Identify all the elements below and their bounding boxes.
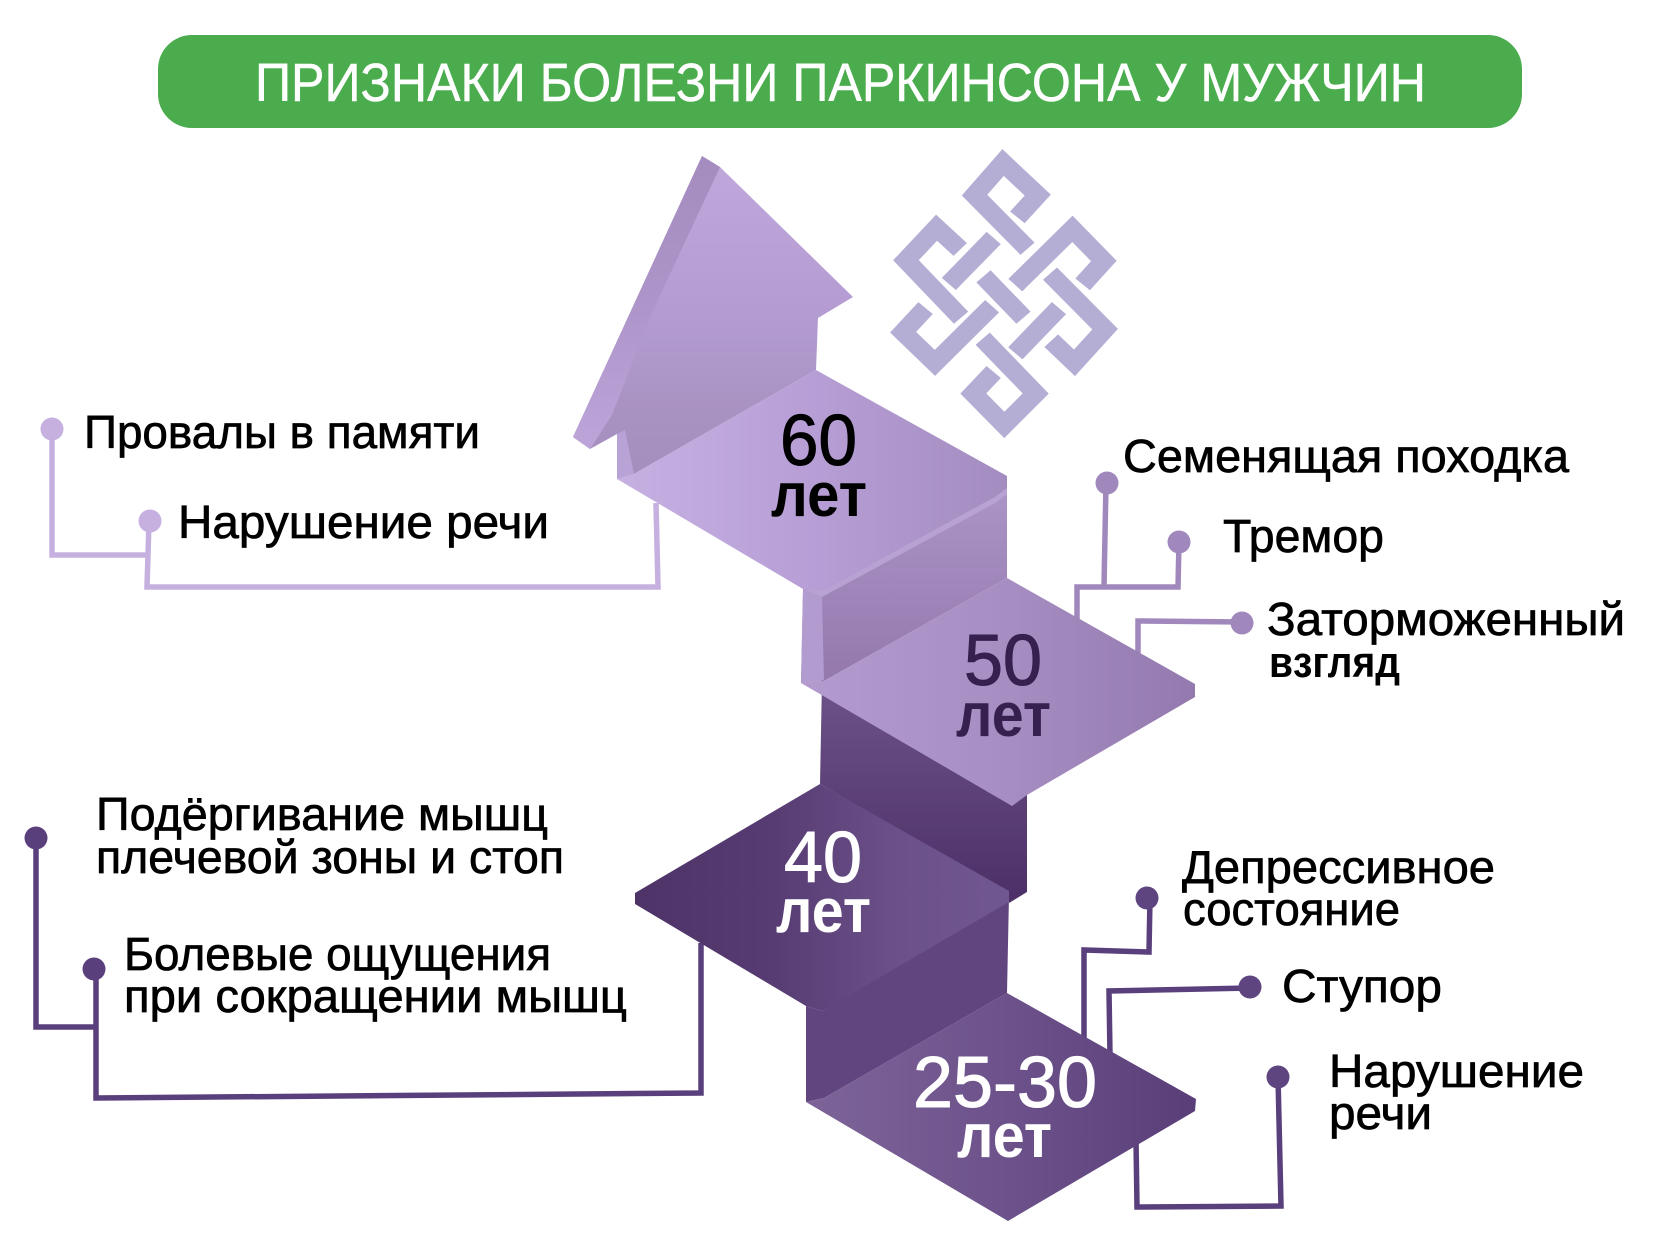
step 50 bbox=[801, 578, 1195, 806]
dot: memory lapses bbox=[40, 418, 64, 440]
label: speech disorder: Нарушение речи bbox=[178, 496, 549, 548]
step 25-30: 25-30 bbox=[913, 1043, 1097, 1123]
label: muscle twitching bbox=[96, 788, 564, 883]
dot: speech disorder bbox=[1266, 1066, 1290, 1088]
title banner bbox=[158, 35, 1522, 128]
step 40: лет bbox=[776, 877, 871, 946]
step 25-30 bbox=[806, 993, 1196, 1221]
dot: tremor bbox=[1168, 530, 1190, 554]
label: muscle twitching: Подёргивание мышц bbox=[96, 788, 548, 840]
label: muscle pain: при сокращении мышц bbox=[124, 970, 627, 1022]
dot: speech disorder bbox=[138, 510, 162, 532]
step 50: 50 bbox=[964, 621, 1042, 701]
dot: depression bbox=[1136, 886, 1158, 910]
label: muscle twitching: плечевой зоны и стоп bbox=[96, 831, 564, 883]
dot: muscle twitching bbox=[24, 826, 48, 850]
label: depression bbox=[1182, 841, 1495, 935]
symptoms at 60 bbox=[40, 406, 549, 548]
label: stupor: Ступор bbox=[1282, 960, 1442, 1012]
symptoms at 50 bbox=[1096, 430, 1625, 687]
label: depression: состояние bbox=[1183, 883, 1400, 935]
riser between 40 and 25-30 bbox=[806, 895, 1009, 1102]
title banner: ПРИЗНАКИ БОЛЕЗНИ ПАРКИНСОНА У МУЖЧИН bbox=[255, 53, 1426, 113]
arrow head bbox=[573, 156, 853, 479]
label: speech disorder bbox=[1329, 1045, 1584, 1139]
label: muscle pain: Болевые ощущения bbox=[124, 928, 551, 980]
connector lines: 25-30 years bbox=[1084, 898, 1281, 1207]
label: vacant gaze: Заторможенный bbox=[1267, 593, 1625, 645]
step 60: лет bbox=[771, 461, 867, 530]
dot: shuffling gait bbox=[1096, 472, 1118, 494]
label: vacant gaze bbox=[1267, 593, 1625, 687]
connector lines: 60 years bbox=[52, 429, 658, 587]
label: speech disorder: Нарушение bbox=[1329, 1045, 1584, 1097]
label: memory lapses: Провалы в памяти bbox=[84, 406, 480, 458]
dot: muscle pain bbox=[82, 958, 106, 980]
riser between 60 and 50 bbox=[801, 476, 1007, 683]
label: shuffling gait: Семенящая походка bbox=[1123, 430, 1569, 482]
symptoms at 40 bbox=[24, 788, 627, 1022]
label: vacant gaze: взгляд bbox=[1269, 638, 1400, 687]
step 25-30: лет bbox=[957, 1102, 1052, 1171]
dot: stupor bbox=[1238, 976, 1262, 998]
label: depression: Депрессивное bbox=[1182, 841, 1495, 893]
connector lines: 50 years bbox=[1077, 483, 1242, 660]
dot: vacant gaze bbox=[1230, 612, 1254, 634]
label: muscle pain bbox=[124, 928, 627, 1022]
step 60 bbox=[617, 370, 1007, 597]
riser between 50 and 40 bbox=[820, 680, 1027, 903]
step 50: лет bbox=[956, 681, 1051, 750]
icon: endless knot bbox=[903, 163, 1105, 425]
staircase arrow bbox=[573, 156, 1196, 1221]
step 40: 40 bbox=[784, 818, 862, 898]
step 60: 60 bbox=[780, 401, 857, 481]
label: tremor: Тремор bbox=[1223, 510, 1384, 562]
symptoms at 25-30 bbox=[1136, 841, 1584, 1139]
step 40 bbox=[635, 784, 1009, 1011]
connector lines: 40 years bbox=[36, 838, 701, 1098]
label: speech disorder: речи bbox=[1329, 1087, 1432, 1139]
